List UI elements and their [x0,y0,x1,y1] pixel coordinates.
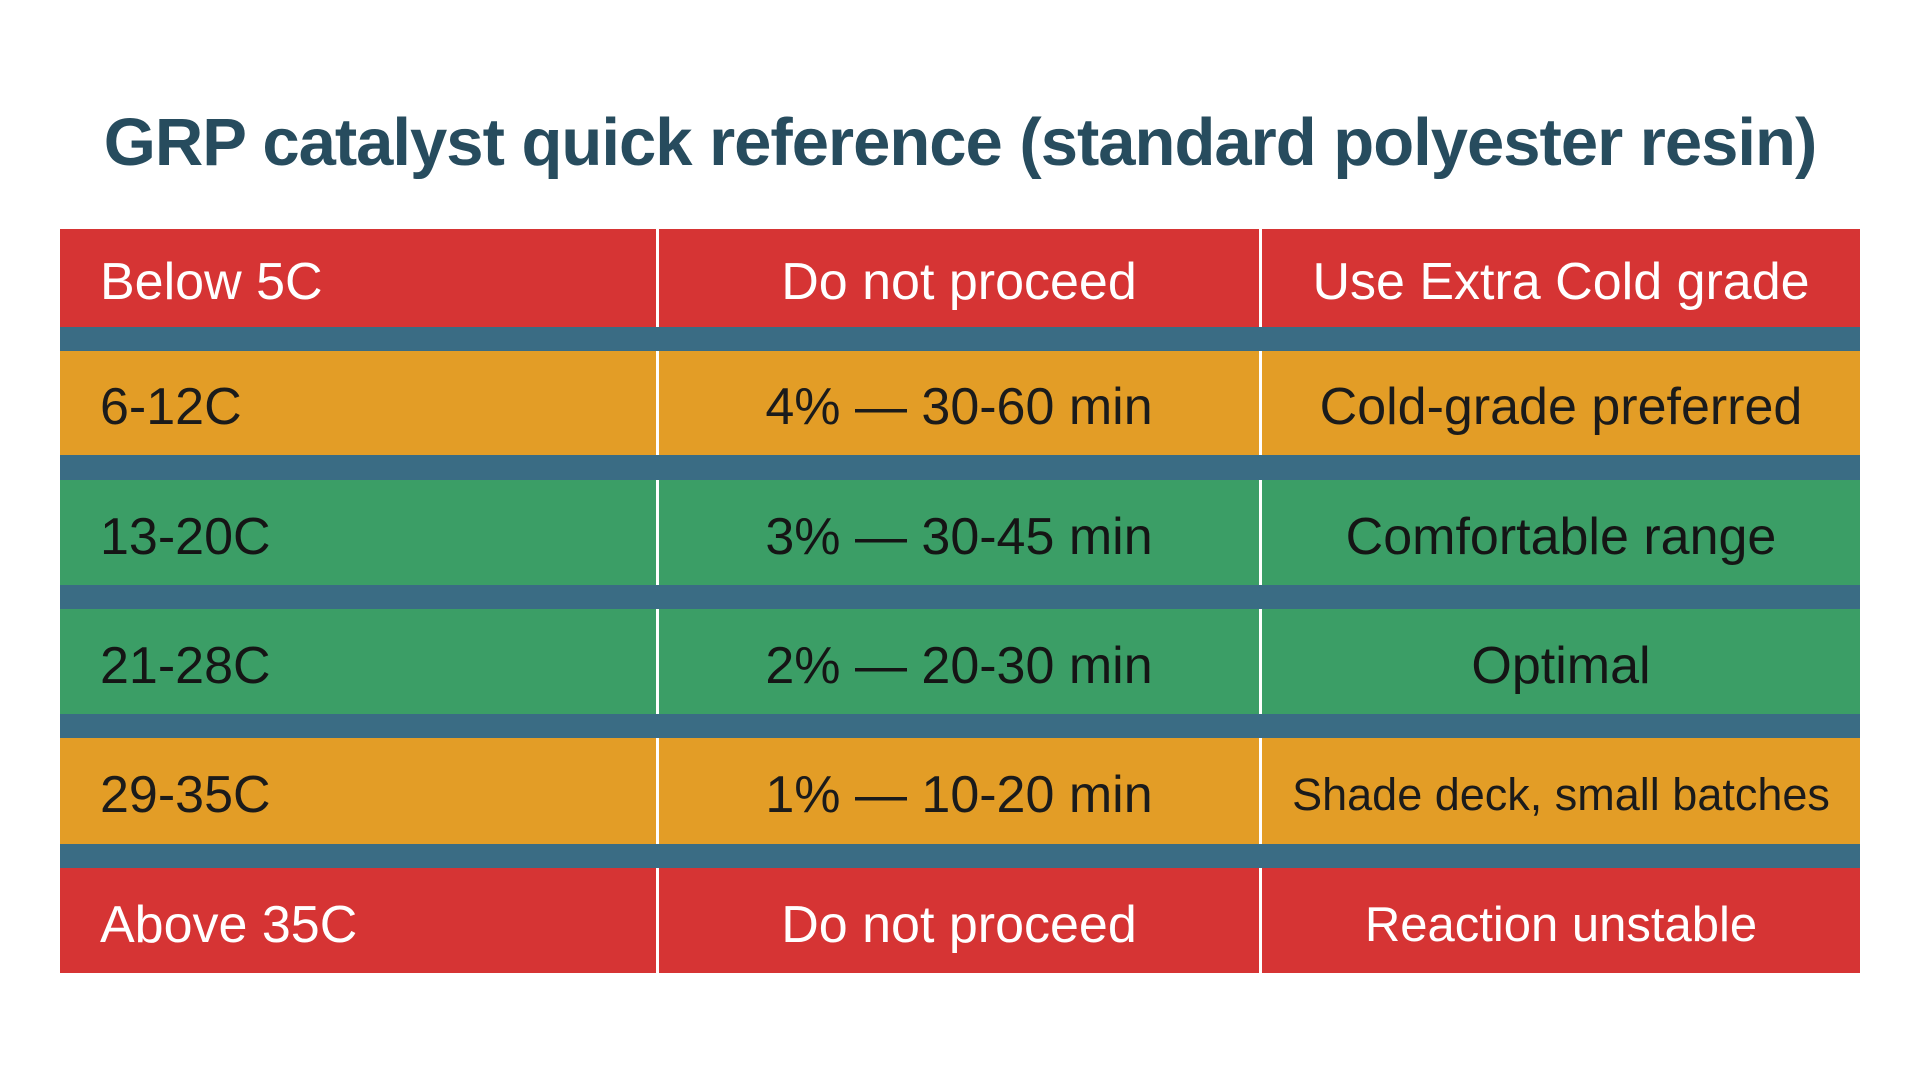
row: 6-12C: 4% — 30-60 min [765,378,1153,436]
row: 21-28C: Optimal [1471,636,1651,694]
row: 29-35C: 1% — 10-20 min [765,766,1153,824]
row: below 5C: Do not proceed [781,253,1137,311]
row: 6-12C [60,351,1860,455]
row: above 35C: Above 35C [100,896,357,954]
row: below 5C [60,229,1860,327]
row: 21-28C: 21-28C [100,636,271,694]
row: 13-20C: 13-20C [100,508,271,566]
row: below 5C: Below 5C [100,253,323,311]
row: above 35C: Reaction unstable [1365,898,1757,952]
row: 13-20C [60,480,1860,585]
row: 29-35C: 29-35C [100,766,271,824]
row: 29-35C [60,738,1860,844]
table [60,229,1860,973]
row: above 35C: Do not proceed [781,896,1137,954]
row: 21-28C: 2% — 20-30 min [765,636,1153,694]
row: 13-20C: 3% — 30-45 min [765,508,1153,566]
row: 6-12C: 6-12C [100,378,242,436]
row: above 35C [60,868,1860,973]
row: 29-35C: Shade deck, small batches [1292,769,1830,820]
row: 21-28C [60,609,1860,714]
row: below 5C: Use Extra Cold grade [1312,253,1810,311]
row: 13-20C: Comfortable range [1346,508,1776,566]
row: 6-12C: Cold-grade preferred [1320,378,1802,436]
title: GRP catalyst quick reference (standard polyester resin) [104,105,1816,180]
